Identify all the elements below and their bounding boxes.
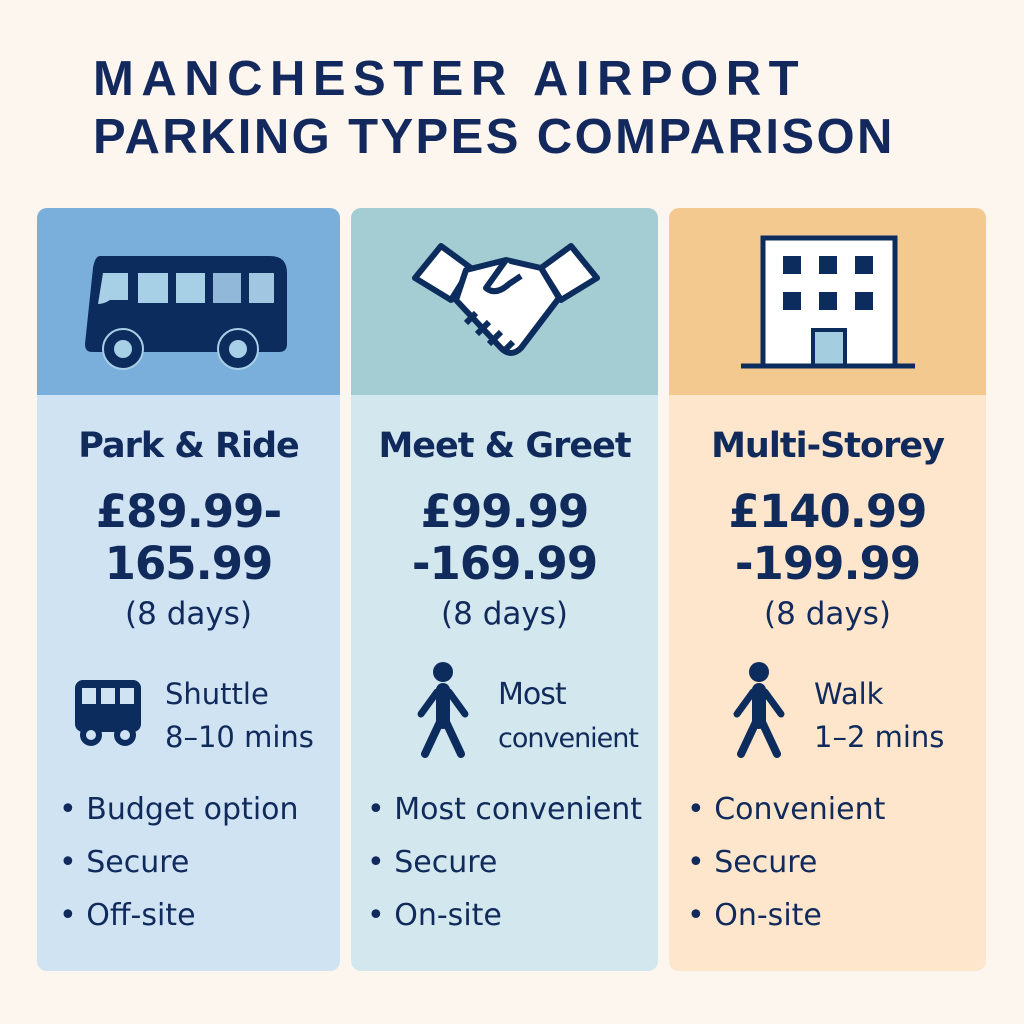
heading: Meet & Greet xyxy=(378,426,631,466)
bullet list: • Budget option xyxy=(59,792,299,827)
bullet list: • Secure xyxy=(367,845,497,880)
title: PARKING TYPES COMPARISON xyxy=(93,110,895,164)
icon: small bus xyxy=(75,680,141,746)
panel: park & ride xyxy=(37,208,340,971)
bullet list: • Most convenient xyxy=(367,792,642,827)
price xyxy=(412,485,597,590)
price: £99.99 xyxy=(421,485,588,538)
feature text: 1–2 mins xyxy=(814,720,944,754)
bullet list xyxy=(59,792,299,933)
bullet list xyxy=(367,792,642,933)
icon: walking person xyxy=(418,662,468,758)
bullet list: • Off-site xyxy=(59,898,196,933)
duration: (8 days) xyxy=(125,596,252,632)
icon: walking person xyxy=(734,662,784,758)
feature text: 8–10 mins xyxy=(165,720,314,754)
duration: (8 days) xyxy=(764,596,891,632)
title xyxy=(93,52,895,164)
price: -199.99 xyxy=(735,537,920,590)
bullet list xyxy=(687,792,885,933)
icon: building xyxy=(741,236,915,368)
price: £89.99- xyxy=(96,485,281,538)
price xyxy=(729,485,926,590)
price xyxy=(96,485,281,590)
feature text: Most xyxy=(498,677,566,712)
bullet list: • Secure xyxy=(687,845,817,880)
feature text: Shuttle xyxy=(165,677,269,711)
panel: meet & greet xyxy=(351,208,658,971)
feature text: Walk xyxy=(814,677,883,711)
bullet list: • Convenient xyxy=(687,792,885,827)
title: MANCHESTER AIRPORT xyxy=(93,52,806,106)
icon: handshake xyxy=(412,243,600,356)
feature text xyxy=(498,677,638,754)
bullet list: • Secure xyxy=(59,845,189,880)
heading: Park & Ride xyxy=(78,426,299,466)
icon: bus xyxy=(85,256,287,370)
price: -169.99 xyxy=(412,537,597,590)
feature text xyxy=(814,677,944,754)
feature text: convenient xyxy=(498,723,638,754)
bullet list: • On-site xyxy=(367,898,502,933)
bullet list: • On-site xyxy=(687,898,822,933)
panel: multi-storey xyxy=(669,208,986,971)
price: 165.99 xyxy=(105,537,272,590)
heading: Multi-Storey xyxy=(711,426,944,466)
price: £140.99 xyxy=(729,485,926,538)
duration: (8 days) xyxy=(441,596,568,632)
feature text xyxy=(165,677,314,754)
